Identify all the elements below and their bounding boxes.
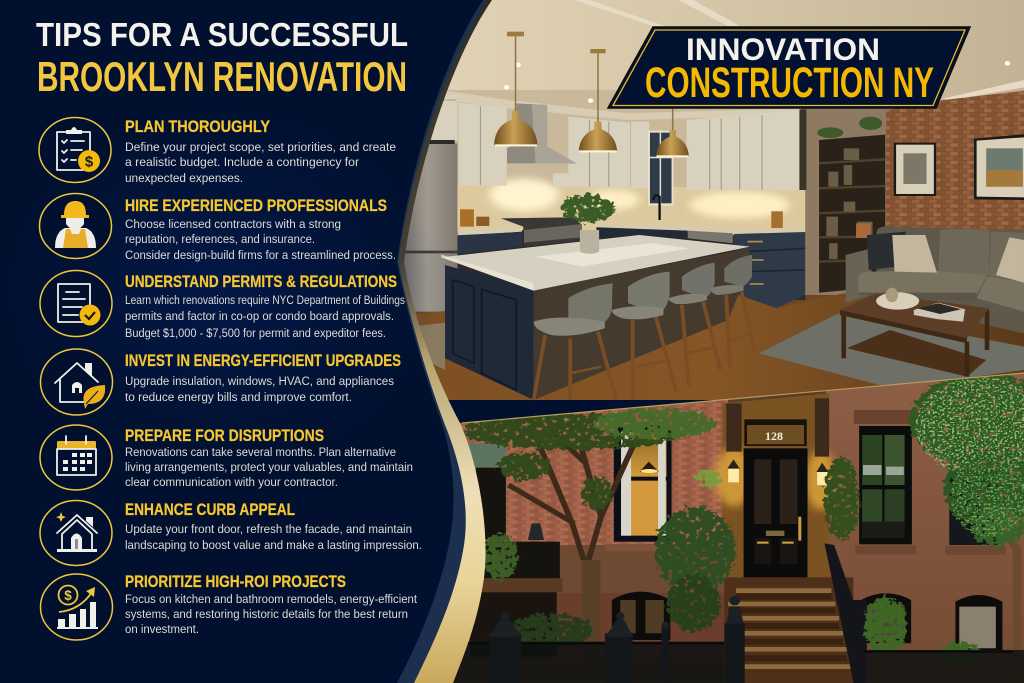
refrigerator — [397, 143, 457, 312]
icon: construction worker — [40, 194, 112, 258]
body text: a realistic budget. Include a contingency for — [125, 155, 359, 169]
body text: Budget $1,000 - $7,500 for permit and expeditor fees. — [125, 326, 386, 340]
framed art — [894, 134, 1024, 200]
lower kitchen shadow — [458, 230, 805, 300]
corbels — [726, 398, 829, 457]
body text: systems, and restoring historic details for the best return — [125, 607, 408, 621]
heading: UNDERSTAND PERMITS & REGULATIONS — [125, 272, 397, 291]
body text: Update your front door, refresh the facade, and maintain — [125, 522, 412, 536]
body text: Choose licensed contractors with a strong — [125, 217, 341, 231]
iron fence — [453, 596, 1024, 683]
brownstone facade — [826, 374, 1024, 650]
tip 3: understand permits and regulations — [40, 270, 405, 340]
brownstone base — [557, 545, 724, 594]
floor — [397, 293, 1024, 400]
range hood — [507, 103, 576, 163]
body text: on investment. — [125, 622, 199, 636]
heading: PREPARE FOR DISRUPTIONS — [125, 426, 324, 445]
tip 2: hire experienced professionals — [40, 194, 396, 262]
icon: rising bar chart with dollar coin — [40, 574, 112, 640]
divider: photo seam — [462, 373, 1024, 423]
heading: PRIORITIZE HIGH-ROI PROJECTS — [125, 572, 346, 591]
brick wall — [886, 91, 1024, 233]
photo: kitchen and living room interior — [397, 0, 1024, 400]
left tree — [463, 406, 717, 642]
upper cabinets — [426, 95, 799, 190]
countertop accessories — [460, 209, 474, 227]
heading: ENHANCE CURB APPEAL — [125, 500, 295, 519]
front door — [744, 448, 808, 578]
right window — [854, 410, 919, 554]
kitchen island — [441, 235, 750, 400]
recessed lights — [507, 63, 1007, 101]
body text: Consider design-build firms for a streamlined process. — [125, 248, 396, 262]
transom — [744, 419, 807, 446]
title — [36, 17, 408, 100]
lanterns — [727, 459, 828, 485]
icon: rising bar chart with dollar coin: $ — [64, 588, 72, 603]
tip 5: prepare for disruptions — [40, 425, 413, 490]
sofa — [846, 227, 1024, 333]
icon: clipboard with dollar coin: $ — [85, 154, 94, 170]
bookshelf — [817, 117, 885, 293]
flower vase — [561, 194, 615, 254]
tip 6: enhance curb appeal — [40, 500, 422, 566]
far right window — [949, 470, 999, 545]
body text: Renovations can take several months. Plan alternative — [125, 445, 396, 459]
climbing shrubs — [509, 457, 981, 665]
right tree — [909, 373, 1024, 683]
crown moulding — [574, 0, 1024, 101]
icon: calendar — [40, 425, 112, 490]
number 128: 128 — [765, 429, 783, 443]
left window — [476, 468, 506, 539]
title: BROOKLYN RENOVATION — [37, 53, 407, 100]
tip 1: plan thoroughly — [39, 117, 396, 185]
tip 4: invest in energy-efficient upgrades — [40, 349, 401, 415]
body text: Learn which renovations require NYC Department of Buildings — [125, 293, 405, 307]
body text: reputation, references, and insurance. — [125, 232, 315, 246]
body text: permits and factor in co-op or condo board approvals. — [125, 309, 394, 323]
pendant lights — [494, 32, 689, 156]
stair railing — [824, 543, 867, 683]
heading: PLAN THOROUGHLY — [125, 117, 271, 136]
door surround — [722, 393, 829, 579]
rugs — [759, 312, 1024, 388]
balcony — [482, 523, 563, 592]
window with warm lamp — [614, 425, 672, 542]
photo: brownstone street facade — [420, 370, 1024, 683]
body text: living arrangements, protect your valuables, and maintain — [125, 460, 413, 474]
heading: INVEST IN ENERGY-EFFICIENT UPGRADES — [125, 351, 401, 370]
body text: unexpected expenses. — [125, 171, 243, 185]
body text: Upgrade insulation, windows, HVAC, and appliances — [125, 374, 394, 388]
panel: navy sidebar with curved edge — [0, 0, 492, 683]
icon: house with sparkle — [40, 500, 112, 566]
body text: Define your project scope, set priorities, and create — [125, 140, 396, 154]
title: TIPS FOR A SUCCESSFUL — [36, 17, 408, 54]
kitchen window — [648, 131, 673, 206]
icon: permit document with check — [40, 270, 112, 336]
backsplash — [458, 185, 805, 230]
living room wall — [801, 108, 890, 295]
bar stools — [534, 255, 755, 400]
icon: house with leaf — [40, 349, 112, 415]
body text: to reduce energy bills and improve comfort. — [125, 390, 352, 404]
tip 7: prioritize high-roi projects — [40, 572, 418, 640]
icon: clipboard with dollar coin — [39, 118, 111, 182]
ceiling — [397, 0, 1024, 113]
body text: Focus on kitchen and bathroom remodels, energy-efficient — [125, 592, 418, 606]
heading: HIRE EXPERIENCED PROFESSIONALS — [125, 196, 387, 215]
kitchen wall — [397, 90, 805, 233]
back counters — [458, 225, 522, 236]
body text: landscaping to boost value and make a lasting impression. — [125, 538, 422, 552]
banner: Innovation Construction NY — [608, 27, 970, 108]
body text: clear communication with your contractor. — [125, 475, 338, 489]
stoop stairs — [724, 577, 853, 683]
basement windows — [612, 592, 1002, 650]
gas range — [501, 217, 582, 247]
banner: Innovation Construction NY: INNOVATION — [686, 31, 880, 67]
brick wall — [459, 400, 728, 548]
coffee table — [840, 288, 989, 377]
